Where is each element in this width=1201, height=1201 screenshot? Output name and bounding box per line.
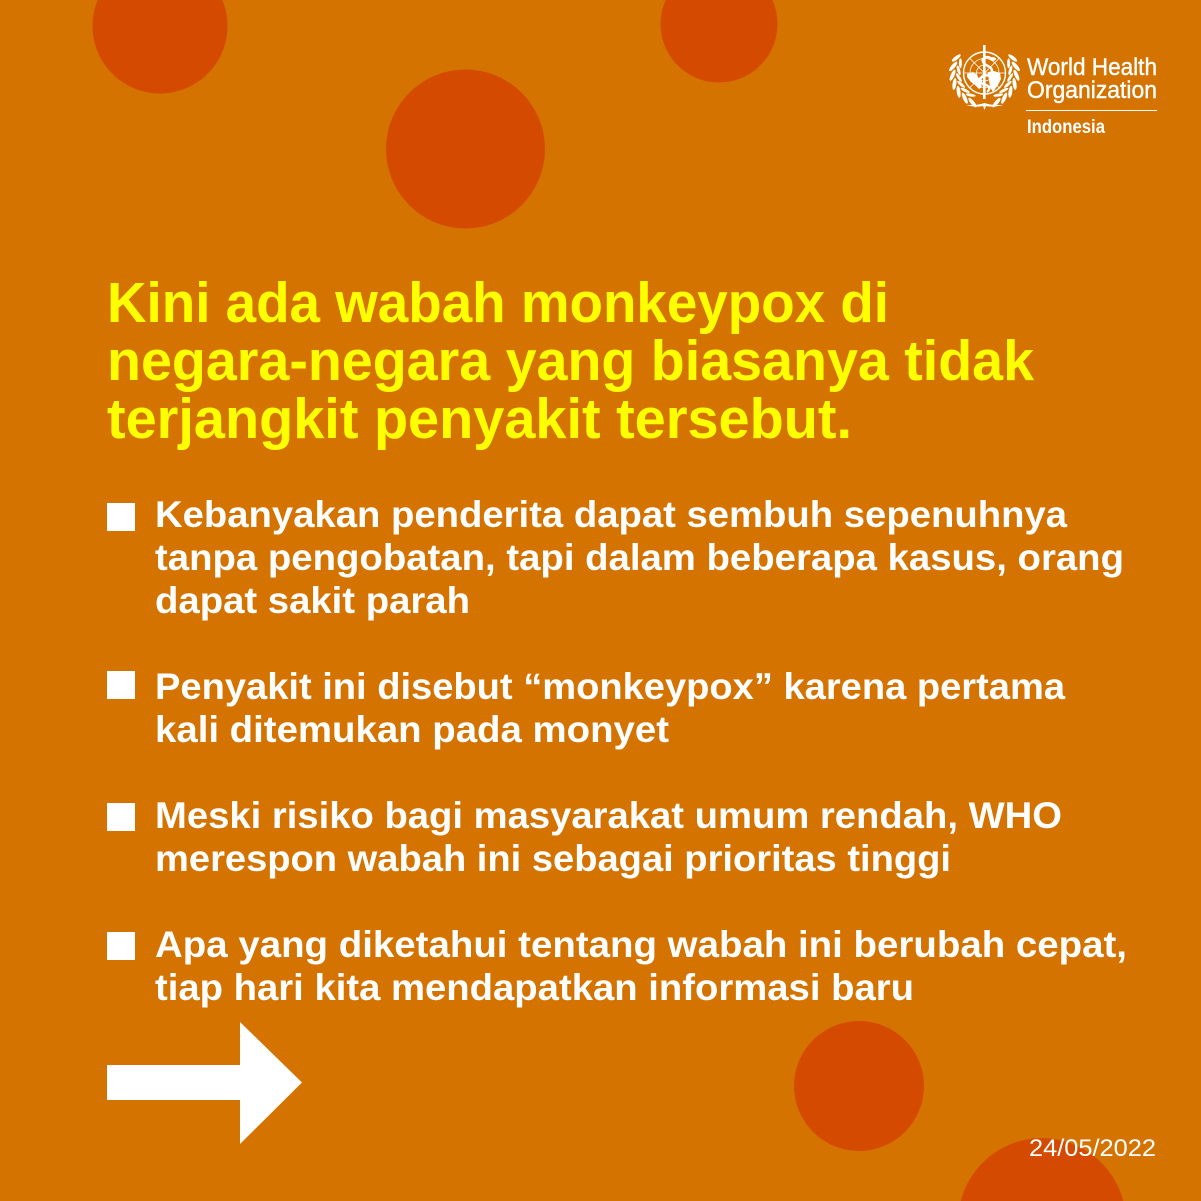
bullet text 4: tiap hari kita mendapatkan informasi baru xyxy=(155,966,914,1008)
bullet text 1: dapat sakit parah xyxy=(155,579,470,621)
bullet item 3 xyxy=(107,794,1062,879)
arrow xyxy=(107,1022,302,1144)
decorative circle: lower right xyxy=(794,1021,924,1151)
title: terjangkit penyakit tersebut. xyxy=(107,387,852,451)
bullet text 2: kali ditemukan pada monyet xyxy=(155,708,670,750)
bullet item 4 xyxy=(107,923,1127,1008)
decorative circle: upper middle xyxy=(386,70,545,228)
bullet item 1 xyxy=(107,493,1124,621)
decorative circle: top left xyxy=(92,0,227,93)
wreath tie xyxy=(966,103,1003,110)
decorative circle: bottom right xyxy=(961,1138,1123,1201)
bullet text 3: Meski risiko bagi masyarakat umum rendah, WHO xyxy=(155,794,1062,836)
bullet text 4: Apa yang diketahui tentang wabah ini berubah cepat, xyxy=(155,923,1127,965)
WHO logo xyxy=(948,45,1157,138)
logo text: Organization: Organization xyxy=(1027,77,1157,104)
icon: square bullet 4 xyxy=(107,932,135,960)
bullet text 4 xyxy=(155,923,1127,1008)
date: 24/05/2022 xyxy=(1029,1135,1156,1162)
laurel wreath left xyxy=(948,53,978,108)
bullet item 2 xyxy=(107,665,1066,750)
icon: WHO emblem xyxy=(948,45,1021,110)
bullet text 1: Kebanyakan penderita dapat sembuh sepenuhnya xyxy=(155,493,1068,535)
bullet text 3: merespon wabah ini sebagai prioritas tinggi xyxy=(155,837,951,879)
laurel wreath right xyxy=(991,53,1021,108)
logo text: Indonesia: Indonesia xyxy=(1027,117,1105,138)
logo divider xyxy=(1026,110,1157,111)
decorative circle: top centre xyxy=(660,0,778,83)
title: negara-negara yang biasanya tidak xyxy=(107,329,1034,393)
logo text: World Health: World Health xyxy=(1027,54,1157,81)
icon: square bullet 1 xyxy=(107,503,135,531)
title xyxy=(107,271,1034,451)
bullet text 3 xyxy=(155,794,1062,879)
bullet text 2 xyxy=(155,665,1066,750)
icon: square bullet 3 xyxy=(107,803,135,831)
bullet text 1: tanpa pengobatan, tapi dalam beberapa kasus, orang xyxy=(155,536,1124,578)
icon: square bullet 2 xyxy=(107,671,135,699)
title: Kini ada wabah monkeypox di xyxy=(107,271,889,335)
bullet text 2: Penyakit ini disebut “monkeypox” karena pertama xyxy=(155,665,1066,707)
bullet text 1 xyxy=(155,493,1124,621)
